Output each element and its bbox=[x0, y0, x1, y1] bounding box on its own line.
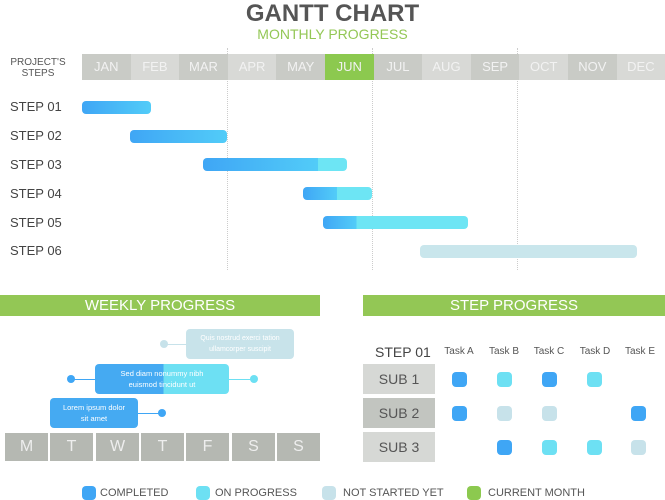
weekday row: T bbox=[67, 438, 76, 455]
weekly progress header: WEEKLY PROGRESS bbox=[85, 297, 235, 314]
month header: JAN bbox=[94, 59, 119, 74]
month header: JUL bbox=[386, 59, 409, 74]
dotted grid lines bbox=[227, 48, 228, 270]
text: SUB 3 bbox=[379, 439, 419, 455]
month header: FEB bbox=[142, 59, 168, 74]
project steps label: STEPS bbox=[22, 68, 54, 79]
weekday row: S bbox=[248, 438, 259, 455]
month header: MAR bbox=[189, 59, 218, 74]
subtitle: MONTHLY PROGRESS bbox=[257, 26, 408, 42]
text: STEP 04 bbox=[10, 186, 62, 201]
callout 2 bbox=[67, 364, 258, 394]
month header: SEP bbox=[482, 59, 508, 74]
text: STEP 05 bbox=[10, 215, 62, 230]
legend: CURRENT MONTH bbox=[488, 487, 585, 499]
weekday row: M bbox=[20, 438, 33, 455]
weekday row: S bbox=[293, 438, 304, 455]
callout 3 bbox=[160, 329, 294, 359]
text: SUB 2 bbox=[379, 405, 419, 421]
legend: COMPLETED bbox=[100, 487, 168, 499]
step progress header bbox=[363, 295, 665, 316]
text: STEP 03 bbox=[10, 157, 62, 172]
project steps label bbox=[10, 57, 66, 79]
month header: NOV bbox=[578, 59, 606, 74]
month header: APR bbox=[239, 59, 265, 74]
legend: NOT STARTED YET bbox=[343, 487, 444, 499]
legend: ON PROGRESS bbox=[215, 487, 297, 499]
text: SUB 1 bbox=[379, 371, 419, 387]
month header: AUG bbox=[432, 59, 461, 74]
step progress table: STEP 01 bbox=[375, 344, 431, 360]
weekday row bbox=[5, 433, 320, 461]
step labels: STEP 01 bbox=[10, 99, 62, 114]
text: STEP 02 bbox=[10, 128, 62, 143]
callout 1 bbox=[50, 398, 166, 428]
callout 1: Lorem ipsum dolor bbox=[63, 403, 125, 412]
text: Task A bbox=[444, 346, 474, 357]
weekday row: T bbox=[158, 438, 167, 455]
month header: OCT bbox=[530, 59, 557, 74]
step progress header: STEP PROGRESS bbox=[450, 297, 578, 314]
callout 2: euismod tincidunt ut bbox=[129, 380, 195, 389]
gantt bars bbox=[82, 101, 151, 114]
weekday row: F bbox=[203, 438, 212, 455]
weekday row: W bbox=[110, 438, 125, 455]
month header: MAY bbox=[287, 59, 314, 74]
callout 3: Quis nostrud exerci tation bbox=[200, 335, 280, 342]
month header: DEC bbox=[627, 59, 655, 74]
text: Task C bbox=[534, 346, 564, 357]
month header bbox=[82, 54, 665, 80]
text: STEP 06 bbox=[10, 243, 62, 258]
month header: JUN bbox=[337, 59, 362, 74]
callout 1: sit amet bbox=[81, 414, 107, 423]
weekly progress header bbox=[0, 295, 320, 316]
title: GANTT CHART bbox=[246, 0, 419, 27]
project steps label: PROJECT'S bbox=[10, 57, 66, 68]
text: Task B bbox=[489, 346, 519, 357]
text: Task E bbox=[625, 346, 655, 357]
callout 2: Sed diam nonummy nibh bbox=[121, 369, 203, 378]
text: Task D bbox=[580, 346, 610, 357]
callout 3: ullamcorper suscipit bbox=[209, 346, 271, 353]
legend bbox=[82, 486, 585, 500]
